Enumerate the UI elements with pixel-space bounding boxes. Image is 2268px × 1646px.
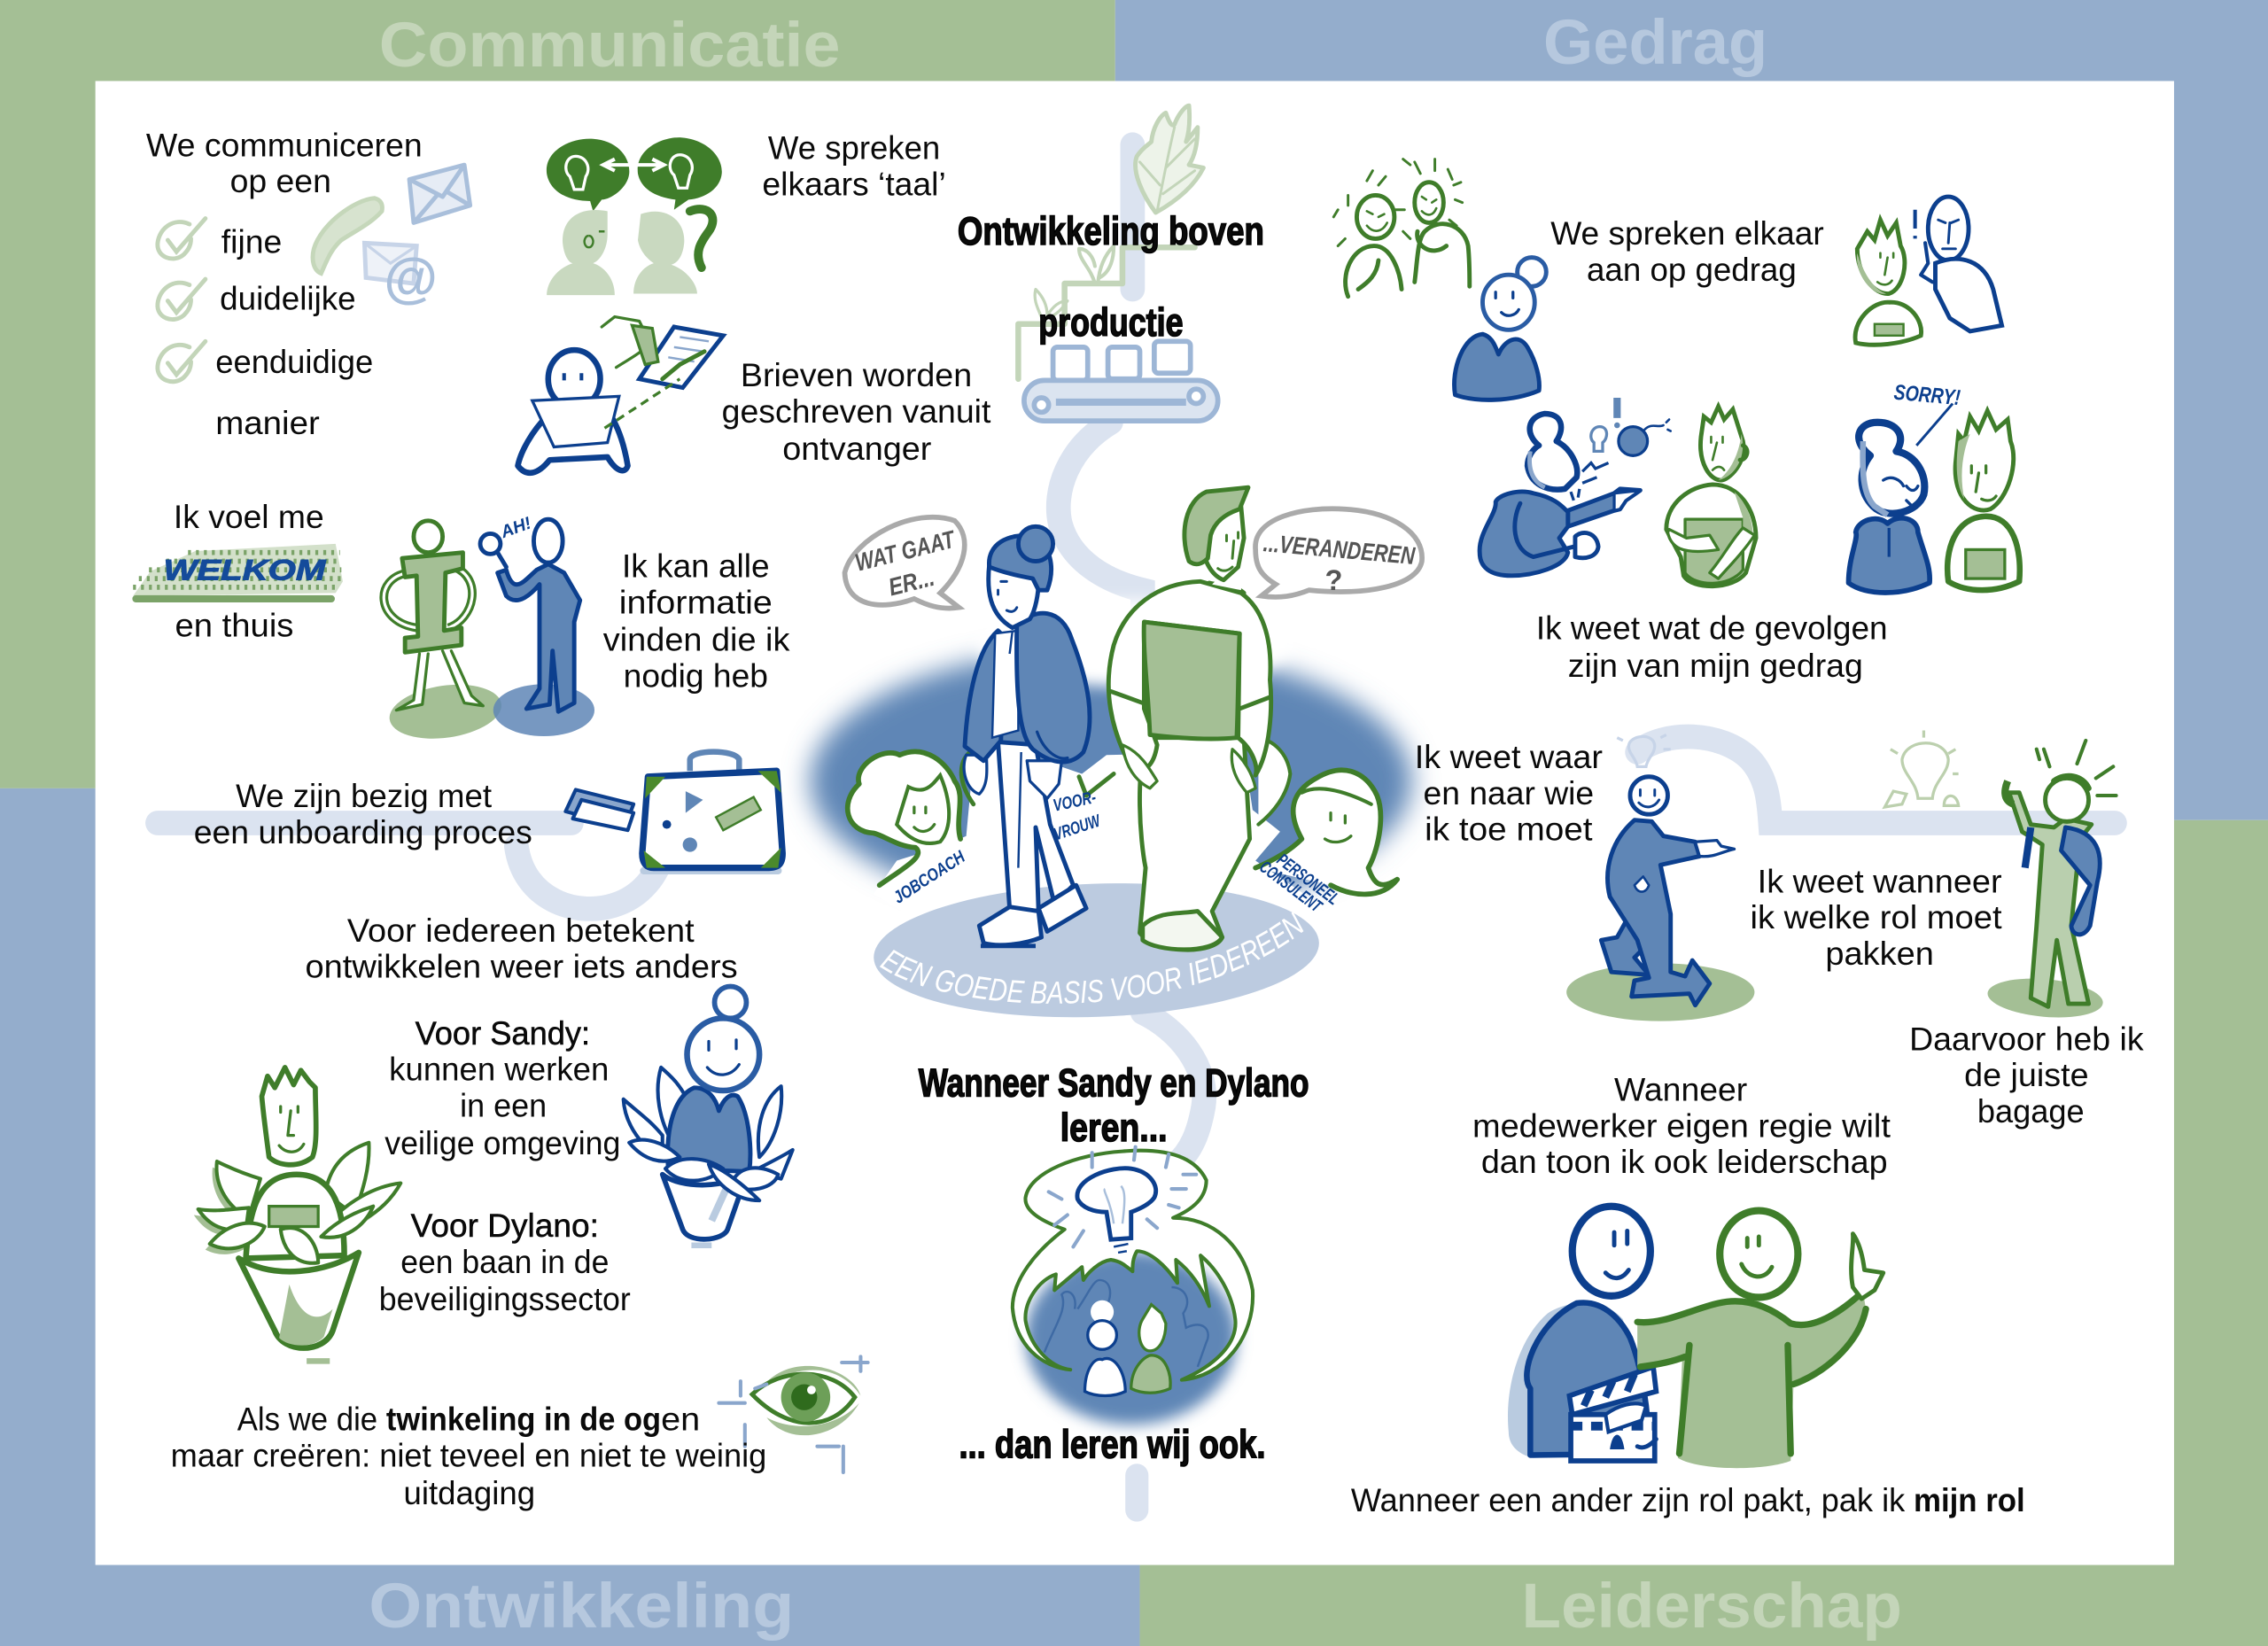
- text: We spreken elkaar aan op gedrag: aan op gedrag: [1587, 252, 1797, 288]
- illustration: walking man with arrow legs: [1566, 777, 1754, 1021]
- heading: Wanneer Sandy en Dylano leren: Wanneer Sandy en Dylano: [919, 1062, 1309, 1106]
- speech bubble: veranderen: ...VERANDEREN: [1262, 529, 1417, 570]
- text: Ik weet waar: Ik weet waar: [1415, 739, 1603, 775]
- illustration: person reading letter, hand writing: [517, 317, 723, 473]
- text: Ik kan alle informatie: Ik kan alle: [622, 547, 770, 584]
- text: Voor Sandy: [384, 1015, 620, 1161]
- label: een goede basis voor iedereen: EEN GOEDE BASIS VOOR IEDEREEN: [880, 912, 1304, 1004]
- icon: envelope and at sign: @: [384, 248, 438, 309]
- text: We zijn bezig met: een unboarding proces: [194, 814, 532, 850]
- text: Daarvoor heb ik: bagage: [1977, 1093, 2085, 1130]
- label: jobcoach: JOBCOACH: [890, 847, 969, 908]
- speech bubble: wat gaat er: [844, 517, 965, 609]
- illustration: letter I character and person with magnifier: AH!: [497, 513, 534, 542]
- text: Voor iedereen betekent: [305, 912, 738, 985]
- text: Daarvoor heb ik: de juiste: [1964, 1057, 2089, 1093]
- icon: suitcase: [642, 752, 782, 871]
- text: Daarvoor heb ik: [1909, 1021, 2144, 1130]
- text: Voor Sandy: kunnen werken: [389, 1052, 609, 1088]
- text: Ik kan alle informatie: [603, 547, 790, 695]
- illustration: stairs and plant: [1018, 105, 1203, 379]
- text: Wanneer medewerker eigen regie: medewerker eigen regie wilt: [1472, 1107, 1891, 1144]
- text: Ik weet waar: en naar wie: [1424, 775, 1594, 811]
- text: Voor iedereen betekent: ontwikkelen weer iets anders: [305, 949, 738, 985]
- text: Ik kan alle informatie: nodig heb: [624, 658, 768, 695]
- text: Wanneer medewerker eigen regie: [1472, 1071, 1891, 1180]
- text: Als we die twinkeling in de ogen: twinkeling in de og: [386, 1401, 661, 1438]
- panel: Communicatie quadrant background: [0, 0, 1115, 788]
- text: eenduidige: eenduidige: [215, 344, 373, 380]
- text: Brieven worden: [722, 357, 990, 467]
- text: Voor Dylano: Voor Dylano:: [411, 1207, 599, 1244]
- speech bubble: veranderen: [1255, 509, 1422, 597]
- heading: Ontwikkeling boven productie: Ontwikkeling boven: [958, 210, 1264, 253]
- heading: Ontwikkeling boven productie: productie: [1038, 301, 1184, 345]
- label: voorvrouw: VOOR-: [1052, 788, 1098, 816]
- illustration: two heads speaking each other's language: [547, 137, 722, 295]
- text: Voor Dylano: [379, 1207, 631, 1317]
- illustration: sorry scene: [1849, 381, 2020, 593]
- text: en thuis: en thuis: [175, 607, 293, 643]
- text: We zijn bezig met: [194, 778, 532, 850]
- illustration: base ellipse: [872, 876, 1321, 1025]
- illustration: Dylano: [1108, 487, 1271, 950]
- icon: envelope and at sign: [364, 243, 438, 309]
- icon: telephone: [313, 198, 382, 274]
- text: We communiceren op een: We communiceren: [146, 127, 423, 163]
- heading: Communicatie: Communicatie: [379, 10, 841, 81]
- label: voorvrouw: VROUW: [1052, 811, 1104, 844]
- illustration: sorry scene: SORRY!: [1893, 381, 1961, 410]
- text: Voor Sandy: in een: [460, 1087, 547, 1123]
- text: Voor Dylano: beveiligingssector: [379, 1281, 631, 1317]
- text: Ik voel me: Ik voel me: [174, 499, 324, 535]
- icon: envelope: [409, 165, 470, 222]
- illustration: two people, clapperboard and leader: [1508, 1207, 1884, 1468]
- heading: Ontwikkeling boven productie: [958, 210, 1264, 345]
- text: Voor Sandy: Voor Sandy:: [416, 1015, 590, 1052]
- icon: check eenduidige: [158, 341, 206, 382]
- text: Als we die twinkeling in de ogen: maar creëren: niet teveel en niet te weinig: [171, 1438, 766, 1474]
- text: Wanneer een ander zijn rol pakt: mijn rol: [1914, 1482, 2025, 1518]
- panel: Leiderschap quadrant background: [1140, 820, 2268, 1646]
- text: Als we die twinkeling in de ogen: [171, 1401, 766, 1511]
- text: Als we die twinkeling in de ogen: Als we die: [237, 1401, 377, 1438]
- text: Brieven worden: geschreven vanuit: [722, 393, 990, 430]
- road: connecting path: [158, 144, 2115, 1510]
- illustration: man with backpack: [1986, 741, 2117, 1021]
- icon: check fijne: [158, 219, 206, 259]
- icon: tickets: [565, 789, 633, 830]
- text: We spreken elkaars taal: [762, 130, 946, 202]
- text: manier: manier: [215, 405, 320, 441]
- text: Wanneer medewerker eigen regie: Wanneer: [1614, 1071, 1747, 1107]
- illustration: conveyor belt: [1024, 341, 1218, 421]
- label: personeel consulent: PERSONEEL: [1273, 850, 1342, 909]
- text: We spreken elkaars taal: elkaars ‘taal’: [762, 166, 946, 202]
- text: Ik weet wanneer: ik welke rol moet: [1751, 899, 2002, 936]
- text: Ik weet wanneer: Ik weet wanneer: [1758, 863, 2002, 899]
- text: Wanneer een ander zijn rol pakt: Wanneer een ander zijn rol pakt, pak ik: [1351, 1482, 1906, 1518]
- text: Ik weet wat de gevolgen: [1536, 610, 1888, 684]
- text: Als we die twinkeling in de ogen: uitdaging: [404, 1475, 535, 1511]
- text: Ik weet wat de gevolgen: zijn van mijn gedrag: [1568, 648, 1863, 684]
- label: personeel consulent: [1255, 850, 1342, 917]
- text: Voor Sandy: veilige omgeving: [384, 1125, 620, 1161]
- text: duidelijke: duidelijke: [220, 280, 356, 316]
- text: We zijn bezig met: We zijn bezig met: [236, 778, 492, 814]
- text: We communiceren op een: op een: [230, 163, 331, 199]
- heading: Leiderschap: Leiderschap: [1522, 1571, 1902, 1642]
- panel: Gedrag quadrant background: [1115, 0, 2268, 820]
- text: We spreken elkaar aan op gedrag: We spreken elkaar: [1550, 215, 1824, 252]
- speech bubble: wat gaat er: WAT GAAT: [852, 525, 959, 577]
- text: Als we die twinkeling in de ogen: en: [661, 1401, 700, 1438]
- text: Ik kan alle informatie: vinden die ik: [603, 622, 790, 658]
- text: Ik weet wat de gevolgen: Ik weet wat de gevolgen: [1536, 610, 1888, 647]
- panel: Ontwikkeling quadrant background: [0, 788, 1140, 1646]
- speech bubble: wat gaat er: ER...: [886, 563, 937, 601]
- icon: welkom hedge: WELKOM: [163, 554, 326, 586]
- text: Voor Dylano: een baan in de: [400, 1244, 609, 1280]
- text: Ik weet wanneer: [1751, 863, 2002, 972]
- illustration: green pair laughing: [1333, 159, 1470, 297]
- label: personeel consulent: CONSULENT: [1255, 858, 1326, 917]
- text: fijne: fijne: [221, 224, 282, 260]
- speech bubble: veranderen: ?: [1325, 563, 1342, 596]
- illustration: blue plant with Sandy: [624, 986, 793, 1246]
- text: Wanneer medewerker eigen regie: dan toon ik ook leiderschap: [1481, 1144, 1888, 1180]
- heading: Ontwikkeling: Ontwikkeling: [369, 1571, 794, 1642]
- icon: check duidelijke: [158, 279, 206, 320]
- illustration: Sandy: [964, 526, 1090, 946]
- illustration: letter I character and person with magnifier: [384, 513, 594, 745]
- illustration: shared learning bulb and group: [1013, 1147, 1253, 1425]
- icon: idea bulb with hats: [1884, 731, 1959, 807]
- illustration: green plant with Dylano: [194, 1068, 400, 1361]
- label: voorvrouw: [1052, 788, 1104, 844]
- text: We spreken elkaar aan op gedrag: [1550, 215, 1824, 288]
- icon: welkom hedge: [133, 544, 343, 599]
- text: Ik kan alle informatie: informatie: [619, 584, 773, 620]
- heading: Wanneer Sandy en Dylano leren: leren...: [1060, 1106, 1168, 1150]
- illustration: anger and consequences: [1480, 398, 1756, 586]
- text: Ik weet wanneer: pakken: [1825, 936, 1934, 972]
- illustration: central blue blob and colleagues: [810, 601, 1411, 940]
- text: Ik weet waar: [1415, 739, 1603, 848]
- heading: dan leren wij ook: ... dan leren wij ook.: [959, 1424, 1266, 1467]
- illustration: blue person thinking: [1455, 258, 1546, 400]
- illustration: addressing behaviour: [1855, 197, 2002, 345]
- text: We communiceren op een: [146, 127, 423, 199]
- text: We spreken elkaars taal: We spreken: [768, 130, 940, 167]
- icon: twinkling eye: [718, 1356, 868, 1472]
- heading: Wanneer Sandy en Dylano leren: [919, 1062, 1309, 1150]
- text: Brieven worden: Brieven worden: [741, 357, 972, 393]
- text: Voor iedereen betekent: Voor iedereen betekent: [347, 912, 695, 949]
- text: Ik weet waar: ik toe moet: [1425, 811, 1593, 848]
- icon: small idea bulb: [1617, 734, 1671, 766]
- text: Brieven worden: ontvanger: [782, 431, 931, 467]
- heading: Gedrag: Gedrag: [1543, 7, 1767, 78]
- text: Daarvoor heb ik: Daarvoor heb ik: [1909, 1021, 2144, 1057]
